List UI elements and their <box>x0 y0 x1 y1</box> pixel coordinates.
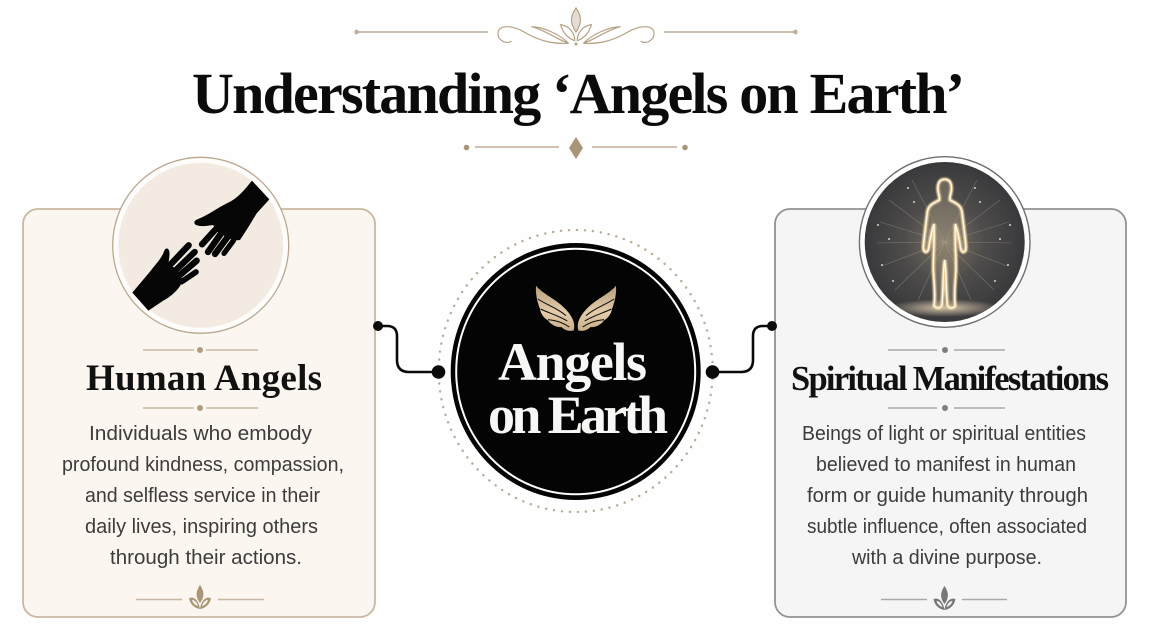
panel description: through their actions. <box>110 547 302 569</box>
badge circle <box>451 243 701 500</box>
title: Understanding ‘Angels on Earth’ <box>192 61 965 126</box>
title divider <box>464 137 688 159</box>
divider <box>143 347 258 353</box>
icon: glowing human figure <box>859 157 1030 327</box>
panel heading: Spiritual Manifestations <box>791 360 1109 398</box>
badge title: on Earth <box>488 385 668 445</box>
panel description: daily lives, inspiring others <box>85 516 318 538</box>
footer ornament <box>136 585 264 609</box>
badge title: Angels <box>498 332 647 392</box>
top ornament <box>354 8 798 45</box>
arrow: connector right <box>706 321 777 379</box>
divider <box>888 347 1005 353</box>
footer ornament <box>881 586 1007 610</box>
panel: spiritual manifestations <box>775 157 1126 617</box>
panel description: Individuals who embody <box>89 423 312 445</box>
dotted ring <box>439 230 713 512</box>
icon: gold wings <box>536 286 616 331</box>
divider <box>888 405 1005 411</box>
panel background <box>23 209 375 617</box>
panel heading: Human Angels <box>86 358 322 399</box>
badge title <box>488 332 668 445</box>
panel description <box>802 423 1088 569</box>
panel description: Beings of light or spiritual entities <box>802 423 1086 445</box>
icon: reaching hands <box>113 157 289 333</box>
panel description: with a divine purpose. <box>851 547 1042 569</box>
panel description: and selfless service in their <box>85 485 320 507</box>
panel description: profound kindness, compassion, <box>62 454 344 476</box>
divider <box>143 405 258 411</box>
panel description: believed to manifest in human <box>816 454 1076 476</box>
panel description <box>62 423 344 569</box>
panel background <box>775 209 1126 617</box>
central badge <box>439 230 713 512</box>
panel description: subtle influence, often associated <box>807 516 1087 538</box>
arrow: connector left <box>373 321 445 379</box>
panel description: form or guide humanity through <box>807 485 1088 507</box>
panel: human angels <box>23 157 375 617</box>
